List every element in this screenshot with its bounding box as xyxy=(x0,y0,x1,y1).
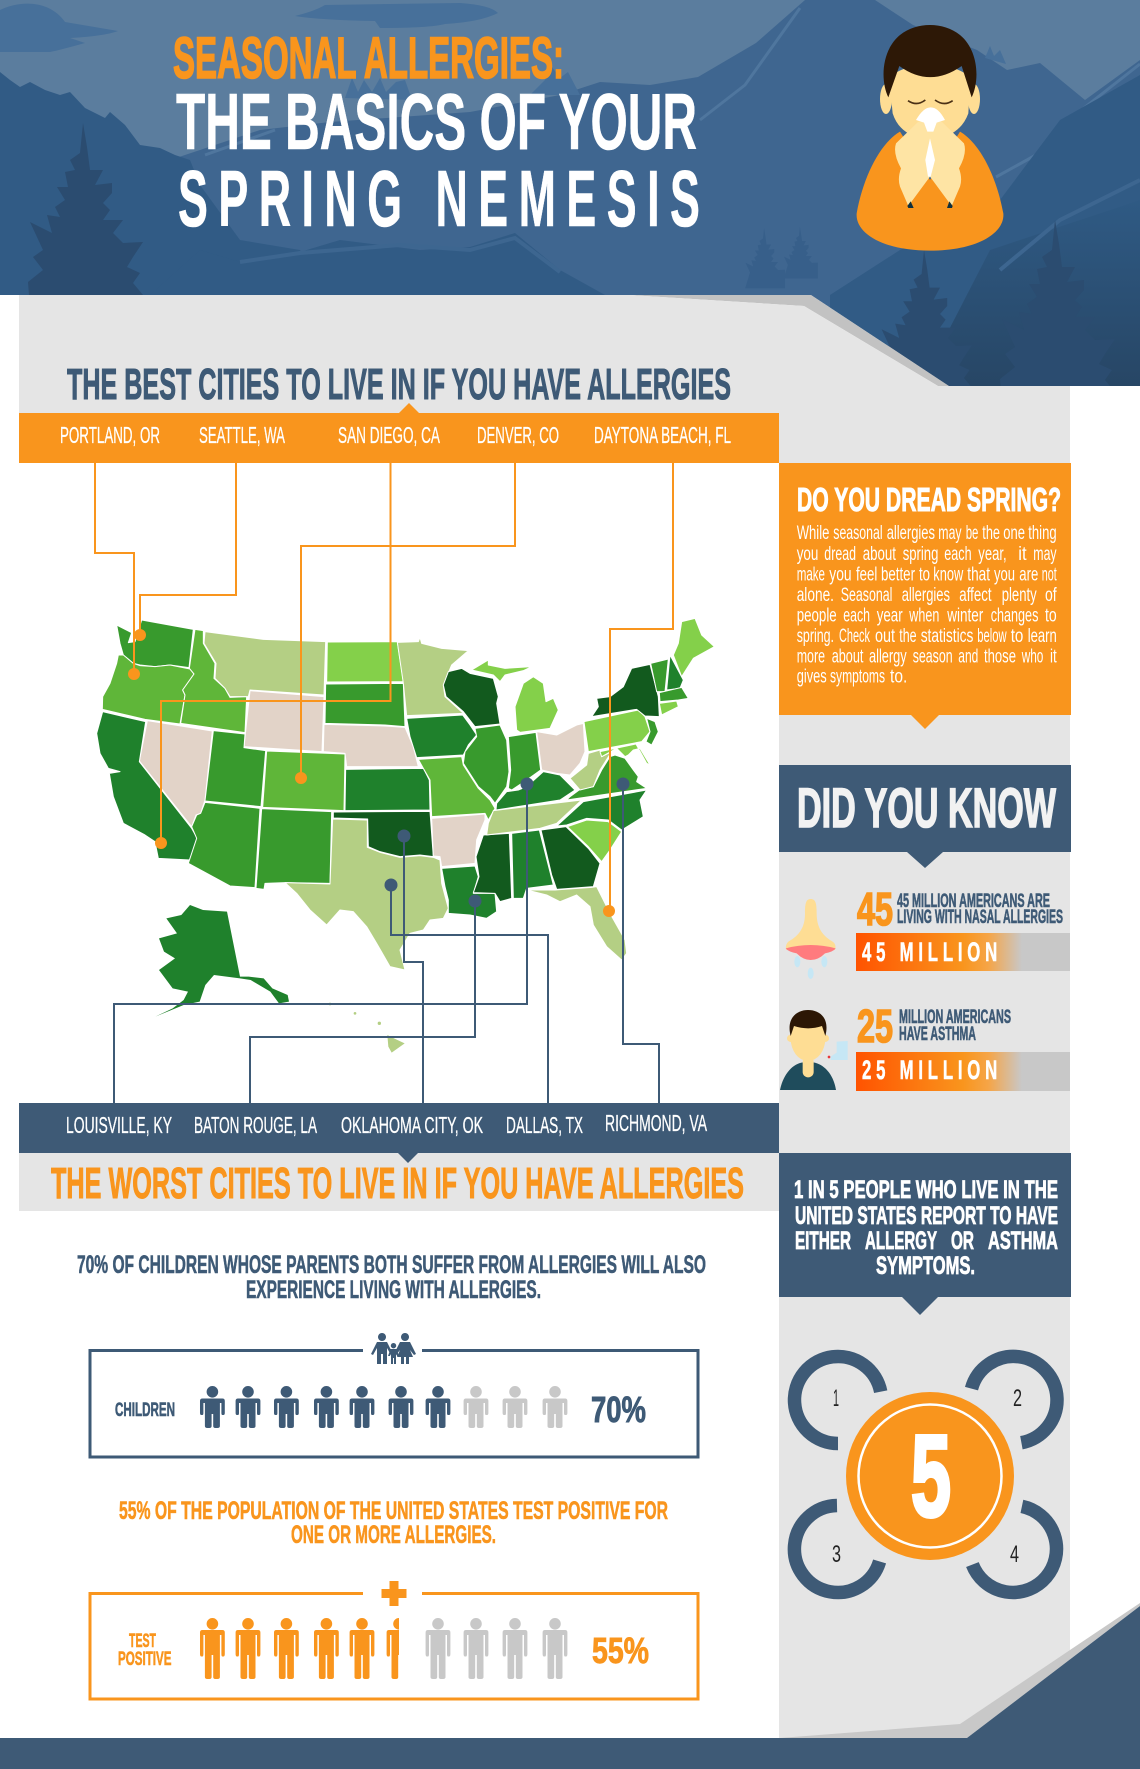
person 4 xyxy=(314,1618,339,1679)
arc 2 xyxy=(972,1356,1057,1443)
line 2: dread xyxy=(824,544,856,565)
father xyxy=(371,1333,393,1364)
icon: person with inhaler xyxy=(780,1010,848,1090)
panel background xyxy=(779,1153,1071,1297)
line 7: it xyxy=(1050,646,1057,668)
city: Richmond: RICHMOND, VA xyxy=(605,1110,707,1136)
panel background xyxy=(779,765,1071,852)
line 3: that xyxy=(967,564,991,586)
bar background xyxy=(19,1103,779,1153)
gray panel: right column xyxy=(779,463,1070,1738)
hair xyxy=(884,25,976,97)
caption line 1: MILLION AMERICANS xyxy=(899,1007,1011,1028)
line: Daytona Beach xyxy=(610,463,673,911)
drop left xyxy=(794,956,800,967)
line 4: of xyxy=(1045,585,1057,606)
title xyxy=(173,26,700,243)
person 2 xyxy=(236,1618,260,1679)
line: Denver xyxy=(301,463,515,778)
person 1 xyxy=(200,1386,225,1428)
line 8: to. xyxy=(890,666,907,688)
dot: Louisville xyxy=(520,778,534,790)
western states xyxy=(97,620,448,970)
pointer xyxy=(398,1153,418,1163)
line 5: people xyxy=(797,606,837,626)
ridge strokes near xyxy=(240,180,1140,272)
person 5 xyxy=(350,1618,374,1679)
far mountains xyxy=(180,0,1140,346)
line: Dallas xyxy=(391,885,548,1103)
child xyxy=(388,1343,399,1364)
statement: test positive statistic xyxy=(119,1497,668,1549)
line 2: year, xyxy=(978,544,1007,565)
person 6: half filled xyxy=(386,1618,399,1679)
diagram: 1 in 5 circles: 1 xyxy=(833,1385,839,1412)
footer shadow xyxy=(780,1603,1140,1738)
distant tree lines xyxy=(345,46,1006,100)
value: 55%: 55% xyxy=(592,1630,649,1671)
line 1: may xyxy=(938,523,962,544)
tree: center right xyxy=(880,250,972,388)
row of ten people, seven filled xyxy=(200,1386,567,1428)
fingernail right xyxy=(947,201,953,208)
line: Oklahoma City xyxy=(404,836,423,1103)
caption line 2: HAVE ASTHMA xyxy=(899,1024,976,1045)
panel frame xyxy=(90,1350,698,1457)
dot: Richmond xyxy=(616,778,630,790)
line 3: know xyxy=(933,564,963,586)
line 1: the xyxy=(982,523,1000,544)
line 1: be xyxy=(966,523,978,544)
panel frame xyxy=(90,1594,698,1699)
line 7: about xyxy=(832,646,864,668)
line 2: spring xyxy=(903,544,938,565)
line 2: each xyxy=(944,544,972,565)
face xyxy=(889,63,971,140)
line 6: Check xyxy=(839,626,870,647)
line 3: better xyxy=(881,564,915,586)
line 6: spring. xyxy=(797,626,834,647)
line 4: plenty xyxy=(1002,585,1037,606)
dot: Denver xyxy=(295,772,307,784)
Alaska xyxy=(155,905,289,1017)
line 7: allergy xyxy=(869,646,907,668)
line 1: one xyxy=(1003,523,1025,544)
icon: plus xyxy=(382,1581,406,1606)
Hawaii xyxy=(329,1003,405,1053)
number 3: 3 xyxy=(832,1541,841,1568)
trees: distant right xyxy=(746,230,776,288)
person 2 xyxy=(236,1386,260,1428)
statement line 2: ONE OR MORE ALLERGIES. xyxy=(291,1521,496,1549)
gray panel shadow xyxy=(630,295,949,386)
line 3: ALLERGY xyxy=(865,1227,937,1255)
city dots: worst cities xyxy=(384,778,630,908)
line: Louisville xyxy=(114,784,527,1103)
diagram: 1 in 5 circles xyxy=(794,1356,1057,1592)
city: San Diego: SAN DIEGO, CA xyxy=(338,422,440,448)
person 8 xyxy=(464,1618,488,1679)
line 2: you xyxy=(797,544,818,565)
city dots: best cities xyxy=(128,629,615,917)
arc 1 xyxy=(794,1356,881,1444)
big number: 25 xyxy=(857,1000,893,1052)
fingernail left xyxy=(907,201,914,208)
connector lines: worst cities xyxy=(114,784,659,1103)
gray band behind worst cities heading xyxy=(19,1153,779,1211)
city: Daytona Beach: DAYTONA BEACH, FL xyxy=(594,422,731,448)
drop center xyxy=(808,968,814,979)
tree: distant right 2 xyxy=(784,236,809,268)
person 3 xyxy=(274,1386,299,1428)
body text xyxy=(797,523,1057,688)
person 1 xyxy=(200,1618,225,1679)
connector lines: best cities xyxy=(95,463,673,911)
pictogram panel: test positive 55% xyxy=(90,1581,698,1699)
line 2: about xyxy=(863,544,897,565)
red dot xyxy=(828,1056,830,1058)
line 4: Seasonal xyxy=(841,585,892,606)
line: San Diego xyxy=(161,463,390,843)
neck xyxy=(803,1057,814,1077)
label line 1: TEST xyxy=(129,1631,156,1652)
pointer xyxy=(907,852,943,868)
line 8: gives xyxy=(797,666,827,688)
line 5: winter xyxy=(947,606,984,626)
line 1 xyxy=(797,523,1057,544)
value: 70%: 70% xyxy=(591,1389,646,1430)
hair xyxy=(790,1010,827,1036)
bar label: 45 MILLION xyxy=(862,937,997,967)
icon: family xyxy=(371,1333,416,1364)
line 1: allergies xyxy=(887,523,935,544)
line 2: may xyxy=(1033,544,1057,565)
left mountain xyxy=(0,72,330,295)
line 3: not xyxy=(1042,564,1057,586)
gap between hands xyxy=(925,138,935,177)
line 5 xyxy=(797,606,1057,626)
line 3: make xyxy=(797,564,825,586)
line 4: alone. xyxy=(797,585,834,606)
line 5: year xyxy=(877,606,903,626)
ear right xyxy=(822,1035,829,1042)
eye right xyxy=(935,100,953,104)
label: children: CHILDREN xyxy=(115,1400,175,1421)
icon: sneezing man with tissue xyxy=(857,25,1003,251)
line 7 xyxy=(797,646,1057,668)
line 6: below xyxy=(977,626,1007,647)
tree: left xyxy=(28,123,143,295)
line 5: to xyxy=(1045,606,1057,626)
line 3: EITHER xyxy=(795,1227,851,1255)
nostrils xyxy=(786,945,836,960)
line 1: While xyxy=(797,523,829,544)
statement: children statistic xyxy=(77,1251,706,1304)
line 4: SYMPTOMS. xyxy=(876,1252,975,1280)
dot: Seattle xyxy=(134,629,146,641)
dot: Baton Rouge xyxy=(468,894,482,908)
person 9 xyxy=(503,1618,527,1679)
line 6: statistics xyxy=(921,626,973,647)
line: Seattle xyxy=(140,463,236,635)
hands xyxy=(895,122,965,206)
big number: 45 xyxy=(857,883,893,935)
center ring xyxy=(858,1404,1002,1548)
gray panel: top xyxy=(19,295,1070,463)
sky xyxy=(0,0,1140,346)
near mountains xyxy=(304,233,604,295)
eye left xyxy=(908,100,925,104)
eastern states xyxy=(397,618,714,960)
line 3 xyxy=(795,1227,1058,1255)
city: Seattle: SEATTLE, WA xyxy=(199,422,285,448)
line 4 xyxy=(797,585,1057,606)
panel: do you dread spring xyxy=(779,463,1071,729)
progress bar xyxy=(856,933,1070,971)
line 6: out xyxy=(875,626,896,647)
line 5: each xyxy=(843,606,870,626)
person 7 xyxy=(426,1618,450,1679)
line 1: thing xyxy=(1028,523,1057,544)
line 8: symptoms xyxy=(830,666,885,688)
bar background xyxy=(19,413,779,463)
number 2: 2 xyxy=(1013,1385,1022,1412)
ears xyxy=(880,84,892,114)
footer corner xyxy=(0,1606,1140,1769)
tree: far right xyxy=(1000,220,1115,392)
line 4: affect xyxy=(959,585,992,606)
pictogram panel: children 70% xyxy=(90,1333,698,1457)
tissue xyxy=(916,107,945,132)
dot: Oklahoma City xyxy=(398,830,410,842)
city: Portland: PORTLAND, OR xyxy=(60,422,160,448)
number 5: 5 xyxy=(911,1411,951,1541)
line 3 xyxy=(797,564,1057,586)
city: Louisville: LOUISVILLE, KY xyxy=(66,1112,172,1138)
person 7 xyxy=(426,1386,450,1428)
person 9 xyxy=(503,1386,527,1428)
number 4: 4 xyxy=(1010,1541,1019,1568)
line 7: those xyxy=(984,646,1016,668)
person 10 xyxy=(543,1386,567,1428)
panel: did you know xyxy=(779,765,1071,868)
pointer xyxy=(902,1297,938,1315)
dot: Portland xyxy=(128,668,140,680)
pointer xyxy=(911,715,939,729)
dot: San Diego xyxy=(155,837,167,849)
panel background xyxy=(779,463,1071,715)
ear left xyxy=(787,1035,794,1042)
line 6 xyxy=(797,626,1057,647)
line 7: who xyxy=(1021,646,1043,668)
line 3: are xyxy=(1019,564,1038,586)
person 10 xyxy=(543,1618,567,1679)
person 6 xyxy=(389,1386,413,1428)
pointer xyxy=(399,403,419,413)
line 5: changes xyxy=(991,606,1038,626)
progress bar xyxy=(856,1052,1070,1091)
line 2: it xyxy=(1018,544,1027,565)
map of United States xyxy=(97,618,714,1053)
row of ten people, five and a half filled xyxy=(200,1618,567,1679)
city: Baton Rouge: BATON ROUGE, LA xyxy=(194,1112,317,1138)
line 6: the xyxy=(899,626,917,647)
city: Denver: DENVER, CO xyxy=(477,422,559,448)
ridge highlights xyxy=(205,8,1140,177)
person 5 xyxy=(350,1386,374,1428)
title line 3: SPRING NEMESIS xyxy=(178,153,700,243)
drop right xyxy=(821,956,827,967)
line 7: season xyxy=(913,646,953,668)
mother xyxy=(394,1333,416,1364)
dot: Daytona Beach xyxy=(603,905,615,917)
line 3: OR xyxy=(951,1227,974,1255)
nose xyxy=(786,899,836,950)
line 3: ASTHMA xyxy=(988,1227,1058,1255)
line 7: more xyxy=(797,646,825,668)
face xyxy=(791,1016,825,1061)
icon: runny nose xyxy=(786,899,836,979)
statement line 1: 70% OF CHILDREN WHOSE PARENTS BOTH SUFFER FROM ALLERGIES WILL ALSO xyxy=(77,1251,706,1279)
line: Portland xyxy=(95,463,134,674)
line 6: learn xyxy=(1028,626,1057,647)
line 3: you xyxy=(994,564,1015,586)
line 3: you xyxy=(829,564,852,586)
inhaler xyxy=(831,1041,848,1060)
line 3: feel xyxy=(856,564,877,586)
line 8 xyxy=(797,666,907,688)
bar label: 25 MILLION xyxy=(862,1055,997,1085)
body xyxy=(857,132,1003,251)
title line 1: SEASONAL ALLERGIES: xyxy=(173,26,564,91)
statement line 2: EXPERIENCE LIVING WITH ALLERGIES. xyxy=(246,1276,541,1304)
person 3 xyxy=(274,1618,299,1679)
line 2 xyxy=(797,544,1057,565)
line 7: and xyxy=(958,646,978,668)
statistic: 45 million xyxy=(856,883,1070,971)
statement line 1: 55% OF THE POPULATION OF THE UNITED STATES TEST POSITIVE FOR xyxy=(119,1497,668,1525)
line 5: when xyxy=(909,606,939,626)
ear right xyxy=(968,84,980,114)
center circle xyxy=(846,1392,1014,1560)
line 4: allergies xyxy=(902,585,950,606)
line: Baton Rouge xyxy=(250,901,475,1103)
person 4 xyxy=(314,1386,339,1428)
statistic: 25 million xyxy=(856,1000,1070,1091)
clouds xyxy=(0,3,498,52)
person 8 xyxy=(464,1386,488,1428)
blue bar: worst cities xyxy=(19,1103,779,1163)
shirt xyxy=(780,1062,836,1090)
line 3: to xyxy=(919,564,930,586)
header illustration: mountains and trees xyxy=(0,0,1140,392)
city: Oklahoma City: OKLAHOMA CITY, OK xyxy=(341,1112,483,1138)
line 1: seasonal xyxy=(833,523,883,544)
label line 2: POSITIVE xyxy=(118,1649,172,1670)
line 6: to xyxy=(1011,626,1023,647)
dot: Dallas xyxy=(384,878,398,892)
arc 4 xyxy=(972,1506,1056,1592)
arc 3 xyxy=(794,1506,880,1592)
label: test positive xyxy=(118,1631,172,1670)
orange bar: best cities xyxy=(19,403,779,463)
line: Richmond xyxy=(623,784,659,1103)
title line 2: THE BASICS OF YOUR xyxy=(176,77,697,166)
panel: 1 in 5 people xyxy=(779,1153,1071,1315)
city: Dallas: DALLAS, TX xyxy=(506,1112,583,1138)
